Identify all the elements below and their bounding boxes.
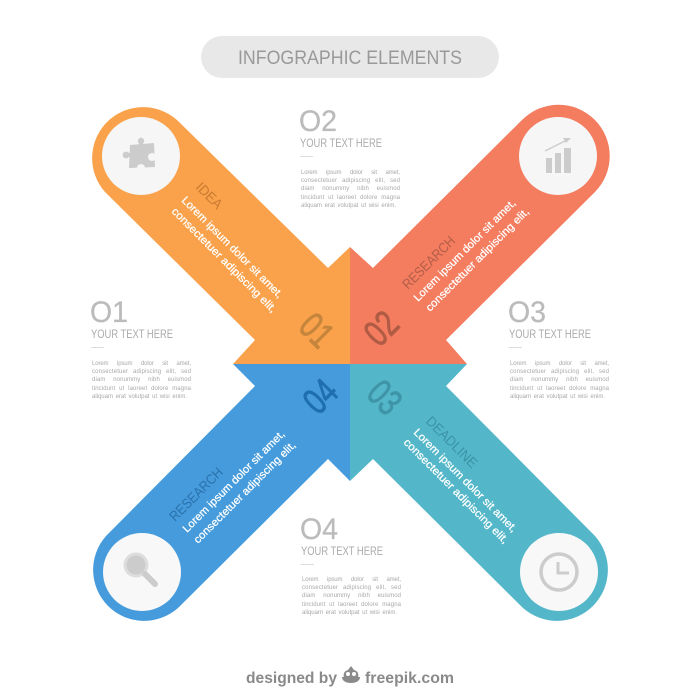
label research: RESEARCH [166,464,226,524]
footer credit: designed by [246,670,337,687]
text block 01 [90,296,192,400]
number 01: 01 [291,305,342,356]
text block 04: YOUR TEXT HERE [301,544,383,558]
text block 01: tincidunt ut laoreet dolore magna [92,386,192,392]
text block 03: consectetuer adipiscing elit, sed [510,369,609,375]
footer credit [246,666,454,687]
text block 02: aliquam erat volutpat ut wisi enim. [301,203,396,209]
text block 03: tincidunt ut laoreet dolore magna [510,386,610,392]
text block 04: consectetuer adipiscing elit, sed [302,585,401,591]
text block 03: O3 [508,296,546,329]
title [201,36,499,78]
text block 03: diam nonummy nibh euismod [510,377,609,383]
text block 04: O4 [300,513,338,546]
text block 02: consectetuer adipiscing elit, sed [301,178,400,184]
text block 02: YOUR TEXT HERE [300,136,382,150]
panel: teal arrow 03 deadline [350,364,608,621]
text block 01: O1 [90,296,128,329]
label idea: IDEA [193,179,227,212]
icon: bar chart with arrow [545,138,571,173]
text block 01: YOUR TEXT HERE [91,327,173,341]
number 04: 04 [295,371,346,422]
arrow text: Lorem ipsum dolor sit amet, [412,197,518,304]
icon: freepik logo [342,666,360,683]
text block 01: consectetuer adipiscing elit, sed [92,369,191,375]
text block 04: aliquam erat volutpat ut wisi enim. [302,610,397,616]
arrow text line two: consectetuer adipiscing elit, [424,206,532,314]
label deadline: DEADLINE [423,413,481,471]
text block 01: diam nonummy nibh euismod [92,377,191,383]
icon: puzzle piece [123,138,156,172]
text block 04: Lorem ipsum dolor sit amet, [302,577,401,583]
text block 03: YOUR TEXT HERE [509,327,591,341]
arrow text line two: consectetuer adipiscing elit, [169,206,278,315]
label research: RESEARCH [399,233,458,292]
arrow text line two: consectetuer adipiscing elit, [401,437,510,546]
text block 01: aliquam erat volutpat ut wisi enim. [92,394,187,400]
text block 04: tincidunt ut laoreet dolore magna [302,602,402,608]
panel: blue arrow 04 research [93,364,350,621]
icon: clock [541,554,577,590]
arrow text: Lorem ipsum dolor sit amet, [179,195,285,301]
number 03: 03 [359,372,410,423]
arrow text: Lorem ipsum dolor sit amet, [181,428,287,535]
text block 02: tincidunt ut laoreet dolore magna [301,195,401,201]
text block 03: Lorem ipsum dolor sit amet, [510,361,609,367]
text block 02: O2 [299,105,337,138]
footer credit: freepik.com [365,670,454,687]
arrow text: Lorem ipsum dolor sit amet, [411,427,519,535]
text block 02 [299,105,401,209]
panel: red arrow 02 research [350,105,610,364]
text block 04: diam nonummy nibh euismod [302,593,401,599]
text block 04 [300,513,402,616]
text block 02: Lorem ipsum dolor sit amet, [301,170,400,176]
arrow text line two: consectetuer adipiscing elit, [192,439,298,546]
icon: magnifier [125,554,155,584]
text block 03: aliquam erat volutpat ut wisi enim. [510,394,605,400]
text block 03 [508,296,610,400]
text block 02: diam nonummy nibh euismod [301,186,400,192]
panel: orange arrow 01 idea [92,107,350,364]
title: INFOGRAPHIC ELEMENTS [238,48,462,69]
number 02: 02 [356,303,407,354]
text block 01: Lorem ipsum dolor sit amet, [92,361,191,367]
